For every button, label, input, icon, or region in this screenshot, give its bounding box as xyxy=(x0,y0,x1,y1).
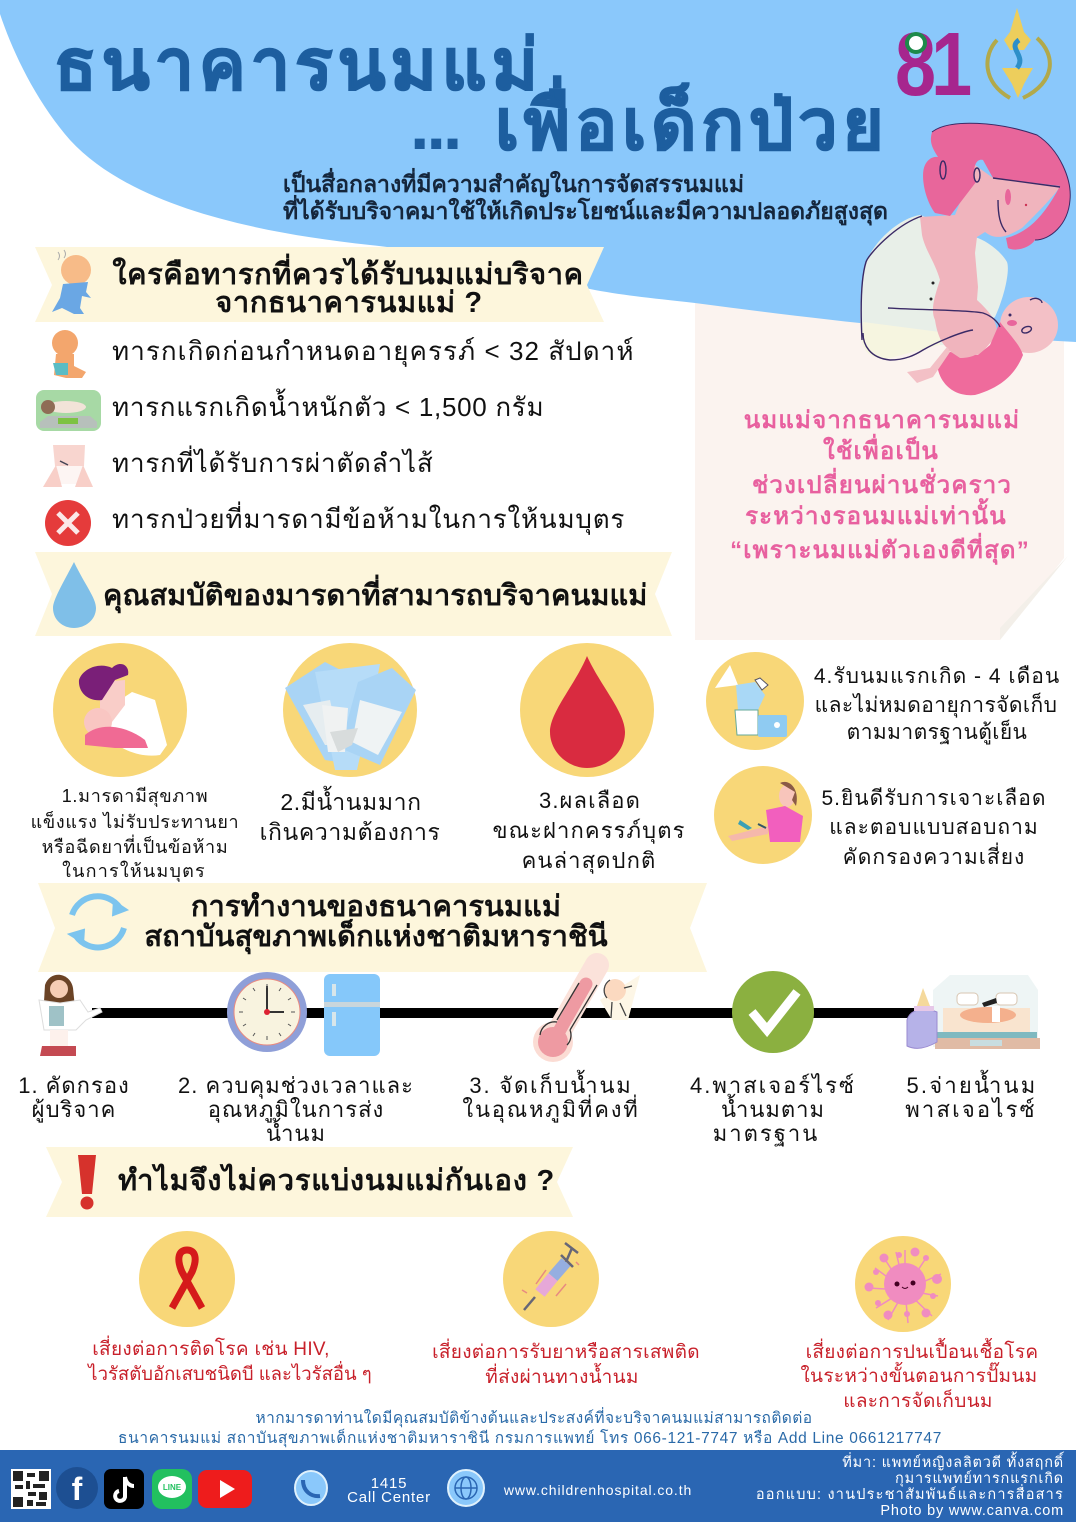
risk: contamination: เสี่ยงต่อการปนเปื้อนเชื้อโรค xyxy=(806,1338,1038,1363)
risk: contamination: ในระหว่างขั้นตอนการปั๊มนม xyxy=(800,1362,1038,1387)
item: premature: ทารกเกิดก่อนกำหนดอายุครรภ์ < 32 สัปดาห์ xyxy=(112,336,635,367)
banner heading: จากธนาคารนมแม่ ? xyxy=(215,287,483,319)
icon: cycle arrows xyxy=(68,896,128,947)
note text xyxy=(730,407,1030,566)
qualification 3: 3.ผลเลือด xyxy=(539,788,641,813)
item: low birth weight xyxy=(36,388,544,431)
qualification 5 xyxy=(714,766,1047,869)
icon: youtube xyxy=(198,1470,252,1508)
step labels: มาตรฐาน xyxy=(713,1121,819,1147)
panel: who should receive donated milk xyxy=(35,247,635,546)
qualification 2 xyxy=(260,643,440,845)
icon: thermometer xyxy=(533,965,640,1062)
banner heading: ใครคือทารกที่ควรได้รับนมแม่บริจาค xyxy=(112,253,584,291)
item: contraindicated: ทารกป่วยที่มารดามีข้อห้ามในการให้นมบุตร xyxy=(112,501,625,535)
step labels: น้ำนม xyxy=(266,1118,326,1146)
qualification 3: คนล่าสุดปกติ xyxy=(522,848,656,874)
risk: contamination: และการจัดเก็บนม xyxy=(843,1388,993,1412)
blue header background xyxy=(0,0,1076,342)
icon: facebook xyxy=(56,1467,98,1509)
banner heading: ทำไมจึงไม่ควรแบ่งนมแม่กันเอง ? xyxy=(118,1163,555,1197)
risk: infection: ไวรัสตับอักเสบชนิดบี และไวรัสอื่น ๆ xyxy=(86,1361,372,1384)
timeline line xyxy=(92,1008,942,1018)
icon: clock xyxy=(227,972,307,1052)
call center text xyxy=(347,1475,431,1506)
qualification 4 xyxy=(706,652,1060,750)
item: premature xyxy=(52,330,635,378)
icon: refrigerator xyxy=(324,974,380,1056)
note text: “เพราะนมแม่ตัวเองดีที่สุด” xyxy=(730,532,1030,566)
logo: 81st anniversary: 81 xyxy=(895,15,971,115)
qualification 2: เกินความต้องการ xyxy=(260,819,440,845)
banner heading: คุณสมบัติของมารดาที่สามารถบริจาคนมแม่ xyxy=(103,574,647,613)
qualification 2: 2.มีน้ำนมมาก xyxy=(280,786,422,815)
icon: QR code xyxy=(11,1469,51,1509)
website: www.childrenhospital.co.th xyxy=(503,1482,692,1498)
step labels: 1. คัดกรอง xyxy=(18,1073,130,1098)
qualification 5: คัดกรองความเสี่ยง xyxy=(843,842,1025,869)
icon: tiktok xyxy=(104,1469,144,1509)
qualification 5: 5.ยินดีรับการเจาะเลือด xyxy=(821,787,1047,810)
subtitle: เป็นสื่อกลางที่มีความสำคัญในการจัดสรรนมแม่ xyxy=(283,167,744,198)
subtitle: ที่ได้รับบริจาคมาใช้ให้เกิดประโยชน์และมีความปลอดภัยสูงสุด xyxy=(283,194,888,226)
credits: กุมารแพทย์ทารกแรกเกิด xyxy=(895,1470,1064,1487)
banner heading xyxy=(35,247,604,322)
banner heading xyxy=(38,883,707,972)
step labels: อุณหภูมิในการส่ง xyxy=(208,1097,384,1123)
credits: ที่มา: แพทย์หญิงลลิตวดี ทั้งสฤกดิ์ xyxy=(842,1451,1065,1471)
icon: globe xyxy=(448,1470,484,1506)
step labels: พาสเจอไรซ์ xyxy=(905,1097,1037,1122)
icon: doctor xyxy=(39,975,102,1056)
qualification 4: ตามมาตรฐานตู้เย็น xyxy=(847,718,1027,745)
contact text xyxy=(118,1407,942,1448)
title xyxy=(54,26,889,164)
qualification 3: ขณะฝากครรภ์บุตร xyxy=(492,818,686,844)
panel: milk bank workflow xyxy=(18,883,1040,1147)
qualification 3 xyxy=(492,643,686,874)
qualification 1 xyxy=(31,643,239,882)
title: เพื่อเด็กป่วย xyxy=(495,75,889,164)
qualification 1: แข็งแรง ไม่รับประทานยา xyxy=(31,810,239,832)
note text: ใช้เพื่อเป็น xyxy=(823,433,939,465)
icon: line: LINE xyxy=(163,1483,182,1492)
banner heading xyxy=(35,552,672,636)
step labels: 4.พาสเจอร์ไรซ์ xyxy=(690,1073,856,1098)
step labels: 2. ควบคุมช่วงเวลาและ xyxy=(178,1073,414,1099)
title: ธนาคารนมแม่ xyxy=(54,26,543,104)
qualification 1: ในการให้นมบุตร xyxy=(62,860,206,882)
call center text: 1415 xyxy=(371,1475,407,1492)
icon: crying baby xyxy=(52,250,91,314)
risk: contamination xyxy=(800,1236,1038,1412)
credits: Photo by www.canva.com xyxy=(880,1503,1064,1519)
contact text: หากมารดาท่านใดมีคุณสมบัติข้างต้นและประสงค์ที่จะบริจาคนมแม่สามารถติดต่อ xyxy=(256,1407,812,1428)
note text: นมแม่จากธนาคารนมแม่ xyxy=(744,407,1020,434)
panel: why not share milk xyxy=(46,1147,1038,1412)
banner heading: การทำงานของธนาคารนมแม่ xyxy=(191,891,561,923)
step labels: ในอุณหภูมิที่คงที่ xyxy=(462,1094,640,1123)
item: contraindicated xyxy=(45,500,625,546)
contact text: ธนาคารนมแม่ สถาบันสุขภาพเด็กแห่งชาติมหาราชินี กรมการแพทย์ โทร 066-121-7747 หรือ Add Line 0661217747 xyxy=(118,1428,942,1448)
icon: exclamation mark xyxy=(78,1155,96,1210)
panel: note card xyxy=(695,295,1068,640)
note text: ระหว่างรอนมแม่เท่านั้น xyxy=(745,497,1007,530)
item: low birth weight: ทารกแรกเกิดน้ำหนักตัว < 1,500 กรัม xyxy=(112,388,544,422)
step labels: 3. จัดเก็บน้ำนม xyxy=(469,1070,633,1098)
risk: infection xyxy=(86,1231,372,1384)
icon: water drop xyxy=(53,562,96,628)
icon: facebook: f xyxy=(72,1471,83,1507)
item: bowel surgery xyxy=(43,445,434,487)
illustration: mother and baby xyxy=(860,123,1070,395)
step labels: น้ำนมตาม xyxy=(721,1094,825,1122)
banner heading: สถาบันสุขภาพเด็กแห่งชาติมหาราชินี xyxy=(144,918,608,954)
title: ... xyxy=(410,86,459,164)
step labels: 5.จ่ายน้ำนม xyxy=(906,1070,1038,1098)
call center text: Call Center xyxy=(347,1489,431,1506)
item: bowel surgery: ทารกที่ได้รับการผ่าตัดลำไส้ xyxy=(112,445,434,478)
qualification 1: 1.มารดามีสุขภาพ xyxy=(62,786,208,807)
note text: ช่วงเปลี่ยนผ่านชั่วคราว xyxy=(752,467,1012,499)
logo: emblem xyxy=(987,8,1050,98)
step labels: ผู้บริจาค xyxy=(32,1097,116,1123)
credits: ออกแบบ: งานประชาสัมพันธ์และการสื่อสาร xyxy=(756,1484,1064,1503)
icon: check mark xyxy=(732,971,814,1053)
banner heading xyxy=(46,1147,573,1217)
qualification 4: 4.รับนมแรกเกิด - 4 เดือน xyxy=(814,665,1060,688)
qualification 5: และตอบแบบสอบถาม xyxy=(829,816,1039,839)
risk: drugs: เสี่ยงต่อการรับยาหรือสารเสพติด xyxy=(432,1338,700,1363)
icon: line xyxy=(152,1469,192,1509)
credits xyxy=(756,1451,1065,1519)
step labels xyxy=(18,1070,1038,1147)
risk: drugs xyxy=(432,1231,700,1388)
qualification 1: หรือฉีดยาที่เป็นข้อห้าม xyxy=(42,834,228,857)
subtitle xyxy=(283,167,888,226)
qualification 4: และไม่หมดอายุการจัดเก็บ xyxy=(815,691,1057,718)
risk: drugs: ที่ส่งผ่านทางน้ำนม xyxy=(485,1363,639,1388)
panel: donor qualifications xyxy=(31,552,1060,882)
panel: footer xyxy=(0,1450,1076,1522)
icon: incubator and bottle xyxy=(907,975,1040,1049)
risk: infection: เสี่ยงต่อการติดโรค เช่น HIV, xyxy=(92,1335,330,1360)
icon: phone xyxy=(295,1471,327,1505)
